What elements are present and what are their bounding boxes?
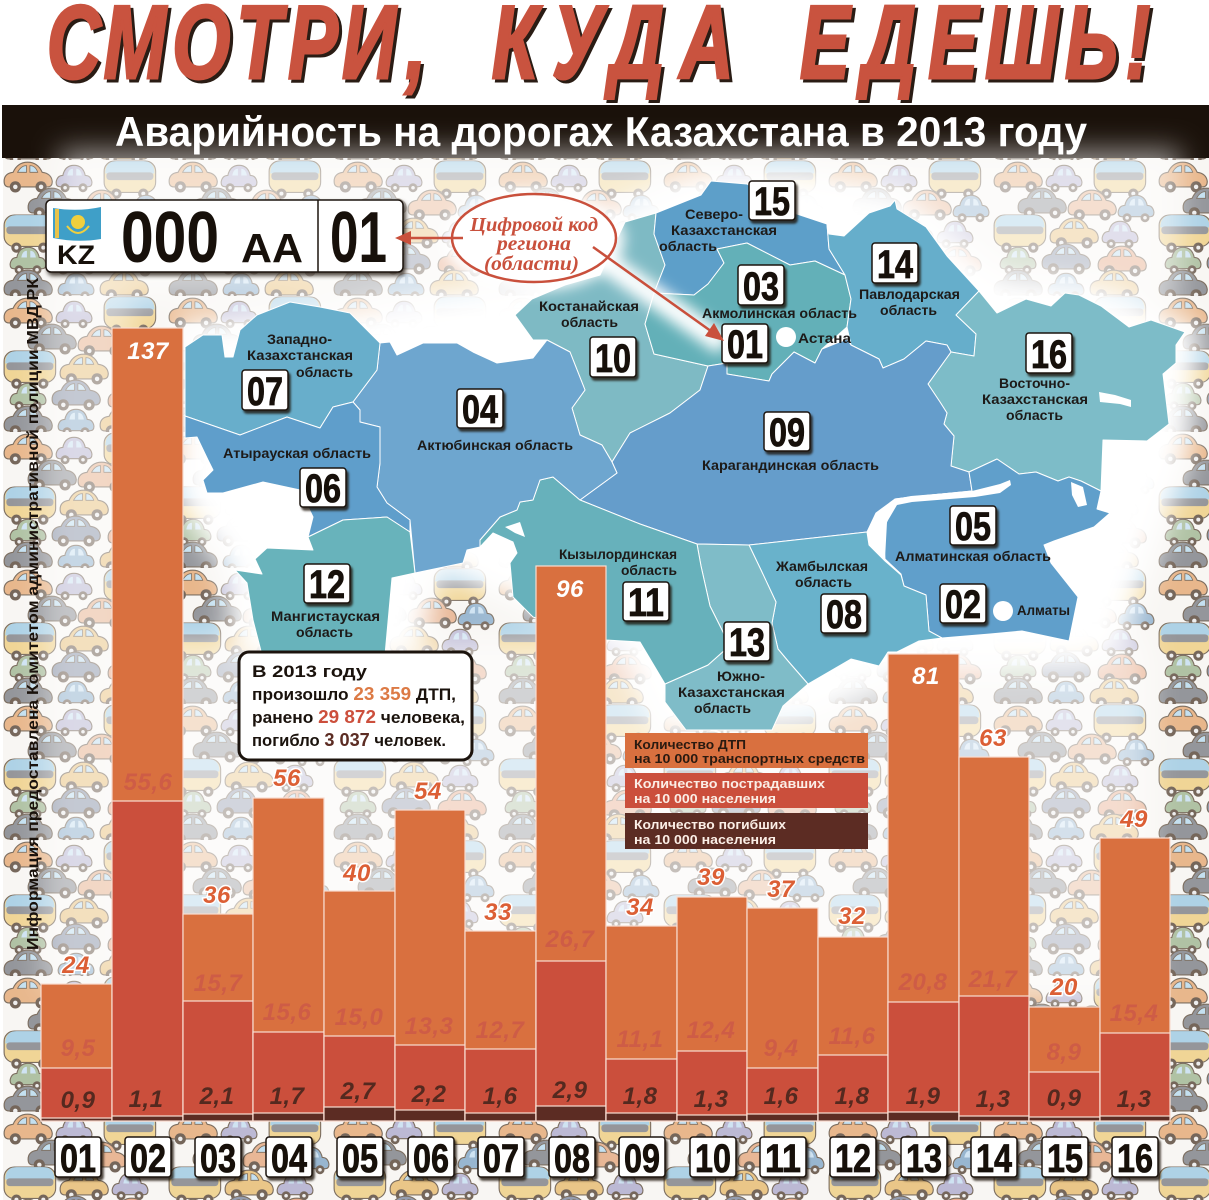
region labels [223,206,1088,716]
axis plate 04: 04 [271,1137,308,1181]
callout: totals: ранено 29 872 человека, [252,707,465,727]
injured values: 11,6 [829,1023,876,1050]
lake Alakol [1071,482,1087,507]
plate 07: 07 [247,370,283,414]
region 03: Akmola [645,243,851,381]
bar 07 [465,931,536,1121]
accident count values: 33 [484,899,512,926]
bar 08 [536,566,606,1121]
label: Karaganda: Карагандинская область [702,457,879,473]
accident count values: 56 [273,765,301,792]
axis plate 16: 16 [1117,1137,1153,1181]
label: Pavlodar: область [880,302,937,318]
label: Kostanay: Костанайская [539,298,639,314]
region 09: Karaganda [580,339,972,545]
deaths values: 2,2 [411,1081,447,1108]
region 15: North Kazakhstan [654,181,845,295]
region 06: Atyrau [185,402,410,537]
label: North Kazakhstan: Северо- [685,206,743,222]
label: Almaty city: Алматы [1017,602,1070,618]
licence plate [46,198,403,278]
plate text: AA: АА [241,225,303,271]
label: Mangystau: Мангистауская [271,608,380,624]
axis plate 12: 12 [835,1137,871,1181]
axis plate 10: 10 [695,1137,731,1181]
deaths values: 2,9 [552,1077,588,1104]
callout: totals [239,652,472,760]
axis plate 02: 02 [130,1137,166,1181]
city marker: Astana [776,327,796,347]
axis plate 09: 09 [624,1137,660,1181]
label: West Kazakhstan: Западно- [267,331,332,347]
lake Balkhash [867,480,1011,559]
plate text: KZ: KZ [57,240,95,270]
label: North Kazakhstan: Казахстанская [671,222,777,238]
callout: totals: произошло 23 359 ДТП, [252,684,456,704]
background fade [42,150,1200,1000]
legend [625,733,868,849]
label: Almaty oblast: Алматинская область [895,548,1051,564]
injured values: 13,3 [405,1013,454,1040]
arrow glow [444,190,724,345]
injured values: 15,4 [1110,1000,1158,1027]
region 07: West Kazakhstan [185,302,380,435]
legend row: accidents: Количество ДТП [634,737,746,752]
label: Kostanay: область [561,314,618,330]
label: East Kazakhstan: область [1006,407,1063,423]
label: Astana: Астана [798,330,851,346]
callout: totals: погибло 3 037 человек. [252,730,446,750]
region 12: Mangystau [235,517,415,655]
accident count values: 36 [203,882,231,909]
injured values: 12,4 [687,1017,735,1044]
axis plate 13: 13 [906,1137,942,1181]
axis plate 06: 06 [413,1137,449,1181]
lake Zaysan [1099,392,1131,407]
bar 11 [747,908,818,1121]
plate 15: 15 [754,180,790,224]
injured values: 9,5 [61,1035,96,1062]
region 11: Kyzylorda [480,477,726,684]
callout: totals: В 2013 году [252,663,368,681]
label: East Kazakhstan: Казахстанская [982,391,1088,407]
label: Kyzylorda: Кызылординская [559,546,677,562]
label: North Kazakhstan: область [659,238,717,254]
deaths values: 1,1 [129,1086,163,1113]
legend row: injured: Количество пострадавших [634,776,826,791]
plate 12: 12 [309,563,345,607]
injured values: 55,6 [124,769,173,796]
plate 14: 14 [877,243,914,287]
plate 10: 10 [595,337,631,381]
deaths values: 1,3 [694,1086,729,1113]
deaths values: 0,9 [61,1087,96,1114]
label: Zhambyl [775,558,868,590]
source note: Информация предоставлена Комитетом административной полиции МВД РК [25,277,42,950]
axis plate 07: 07 [483,1137,519,1181]
plate 08: 08 [826,593,862,637]
axis plate 08: 08 [554,1137,590,1181]
Aral Sea [505,522,525,537]
callout: region code ellipse: (области) [484,253,579,275]
deaths values: 1,7 [270,1083,306,1110]
label: Atyrau: Атырауская область [223,445,371,461]
plate 05: 05 [955,505,991,549]
label: East Kazakhstan: Восточно- [999,375,1070,391]
bar 01 [41,984,112,1121]
injured values: 12,7 [476,1017,526,1044]
arrow to licence plate [395,231,463,245]
injured values: 8,9 [1047,1039,1082,1066]
accident count values: 32 [838,903,866,930]
axis plate 05: 05 [342,1137,378,1181]
injured values: 11,1 [617,1026,663,1053]
label: Akmola: Акмолинская область [702,305,857,321]
legend row: injured: на 10 000 населения [634,791,776,806]
accident count values: 24 [61,952,90,979]
label: Kostanay [539,298,639,330]
legend row: accidents [625,733,868,768]
deaths values: 1,9 [906,1083,941,1110]
deaths values: 1,3 [976,1086,1011,1113]
deaths values: 1,6 [764,1083,799,1110]
callout: region code ellipse: Цифровой код [469,214,598,236]
bar 02 [112,328,183,1121]
bar 05 [324,891,395,1121]
city marker: Almaty [993,601,1013,621]
plate 03: 03 [743,265,779,309]
region 05: Almaty oblast [883,459,1110,641]
deaths values: 1,6 [483,1083,518,1110]
plate 06: 06 [305,467,341,511]
label: South Kazakhstan: Казахстанская [678,684,785,700]
bar 03 [183,914,253,1121]
deaths values: 0,9 [1047,1085,1082,1112]
injured values: 9,4 [764,1035,798,1062]
region 10: Kostanay [515,213,708,462]
injured values: 15,7 [194,970,244,997]
legend row: deaths: Количество погибших [634,817,787,832]
arrow to plate 01 on map [593,247,724,341]
accident count values: 34 [626,894,654,921]
legend row: accidents: на 10 000 транспортных средств [634,751,865,766]
axis plate 11: 11 [765,1137,801,1181]
subtitle banner: Аварийность на дорогах Казахстана в 2013 году [115,108,1088,155]
deaths values [61,1077,1152,1114]
deaths values: 1,3 [1117,1086,1152,1113]
injured values: 20,8 [898,969,948,996]
accident count values [61,338,1148,1001]
axis plate 03: 03 [200,1137,236,1181]
accident count values: 49 [1119,806,1148,833]
plate text: 000: 000 [121,198,219,278]
accident count values: 20 [1049,974,1078,1001]
accident count values: 63 [979,725,1007,752]
label: Mangystau: область [296,624,353,640]
plate 16: 16 [1031,333,1067,377]
map plates [242,180,1072,665]
label: West Kazakhstan [247,331,353,380]
label: South Kazakhstan [678,668,785,716]
axis plates [55,1137,1158,1181]
region 16: East Kazakhstan [928,291,1185,491]
bar 09 [606,926,677,1121]
accident count values: 39 [697,864,725,891]
accident count values: 54 [414,778,442,805]
callout: region code ellipse: региона [495,233,571,255]
label: Kyzylorda [559,546,677,578]
axis plate 15: 15 [1047,1137,1083,1181]
label: South Kazakhstan: область [694,700,751,716]
plate 09: 09 [769,411,805,455]
legend row: injured [625,773,868,808]
bar 10 [677,897,747,1121]
label: Kyzylorda: область [621,562,677,578]
region 04: Aktobe [353,340,617,573]
injured values: 15,0 [335,1004,384,1031]
label: Pavlodar: Павлодарская [859,286,960,302]
bar chart [41,328,1170,1121]
plate 04: 04 [462,388,499,432]
bar 13 [888,654,959,1121]
label: South Kazakhstan: Южно- [717,668,765,684]
accident count values: 40 [342,860,371,887]
legend row: deaths [625,813,868,849]
deaths values: 2,7 [340,1078,377,1105]
injured values: 26,7 [545,926,596,953]
label: West Kazakhstan: область [296,364,353,380]
label: North Kazakhstan [659,206,777,254]
deaths values: 1,8 [623,1083,658,1110]
deaths values: 1,8 [835,1083,870,1110]
label: Zhambyl: область [795,574,852,590]
bar 04 [253,798,324,1121]
plate text: 01: 01 [330,198,387,278]
injured values [61,769,1158,1066]
region 13: South Kazakhstan [665,544,808,730]
plate 02: 02 [945,583,981,627]
plate 01: 01 [727,323,763,367]
plate 11: 11 [628,581,664,625]
label: Zhambyl: Жамбылская [775,558,868,574]
region 08: Zhambyl [749,532,942,684]
label: Aktobe: Актюбинская область [417,437,573,453]
axis plate 14: 14 [976,1137,1013,1181]
region 14: Pavlodar [827,200,979,368]
injured values: 15,6 [263,999,312,1026]
icon: Kazakhstan flag [53,207,101,241]
plate 13: 13 [729,621,765,665]
label: Pavlodar [859,286,960,318]
bar 14 [959,757,1029,1121]
label: Mangystau [271,608,380,640]
map of Kazakhstan [185,181,1185,730]
accident count values: 137 [127,338,170,365]
injured values: 21,7 [968,966,1019,993]
label: West Kazakhstan: Казахстанская [247,347,353,363]
accident count values: 37 [767,876,796,903]
accident count values: 96 [556,576,584,603]
callout: region code ellipse [452,194,616,282]
axis plate 01: 01 [60,1137,96,1181]
bar 15 [1029,1007,1100,1121]
legend row: deaths: на 10 000 населения [634,832,776,847]
bar 06 [395,810,465,1121]
bar 12 [818,937,888,1121]
deaths values: 2,1 [199,1083,234,1110]
bar 16 [1100,838,1170,1121]
accident count values: 81 [912,663,940,690]
label: East Kazakhstan [982,375,1088,423]
